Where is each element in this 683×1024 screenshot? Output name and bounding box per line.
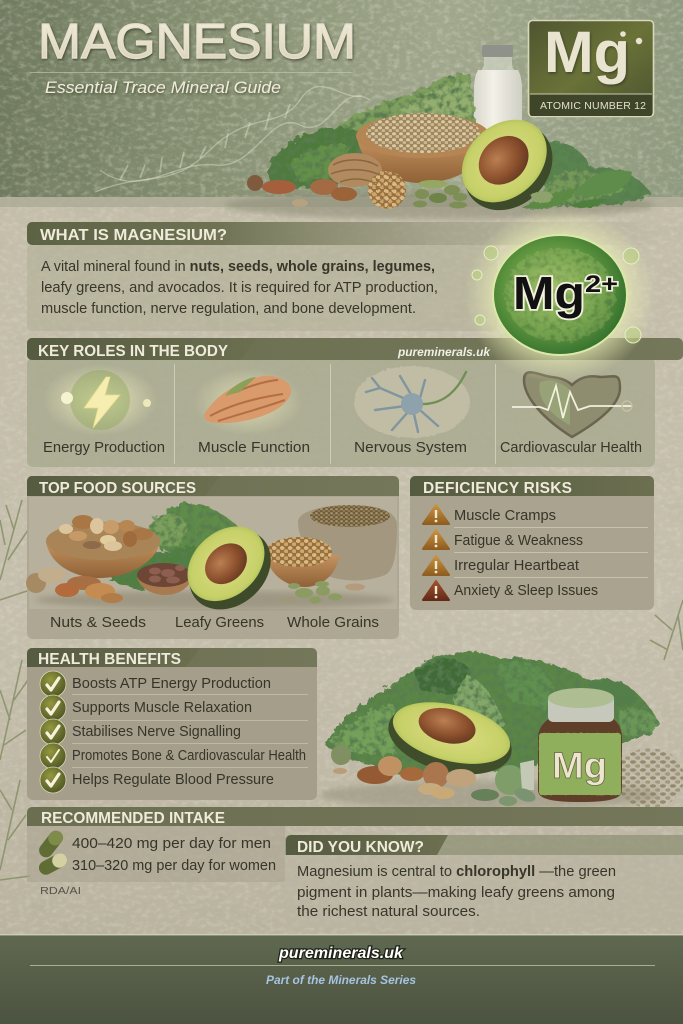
icon: muscle almond	[193, 368, 303, 436]
food heading bar	[27, 476, 399, 496]
intake heading bar	[27, 807, 683, 826]
benefits list: Supports Muscle Relaxation	[72, 699, 252, 716]
warning: muscle cramps	[423, 505, 449, 524]
roles heading tab	[27, 338, 258, 360]
deficiency heading bar	[410, 476, 654, 496]
description text: A vital mineral found in nuts, seeds, whole grains, legumes,	[41, 258, 435, 275]
lentils scatter	[616, 748, 683, 808]
risk list: Irregular Heartbeat	[454, 557, 580, 574]
footer series note: Part of the Minerals Series	[266, 975, 416, 987]
icon: neuron	[354, 366, 470, 438]
callout text: the richest natural sources.	[297, 903, 480, 920]
spinach front leaves	[522, 170, 632, 209]
panel body	[27, 245, 497, 331]
footer url: pureminerals.uk	[278, 945, 404, 962]
panel: top food sources	[26, 476, 399, 639]
greens	[108, 503, 240, 590]
icon: light capsule	[36, 851, 70, 877]
wooden bowl	[356, 113, 490, 183]
leafy greens	[325, 652, 660, 775]
panel: key roles in the body	[27, 338, 683, 467]
risk list: Anxiety & Sleep Issues	[454, 582, 598, 599]
intake body	[27, 824, 285, 882]
panel: did you know	[285, 835, 683, 928]
role labels: Nervous System	[354, 439, 467, 456]
food heading text: TOP FOOD SOURCES	[39, 480, 196, 497]
benefits body	[27, 660, 317, 800]
footer band	[0, 934, 683, 1024]
walnut	[328, 153, 382, 187]
check icons	[40, 671, 66, 793]
role labels: Energy Production	[43, 439, 165, 456]
benefits list	[72, 675, 306, 788]
bean bowl	[137, 563, 192, 595]
benefits heading tab	[27, 648, 200, 667]
description text: leafy greens, and avocados. It is required for ATP production,	[41, 279, 438, 296]
intake amounts: 400–420 mg per day for men	[72, 835, 271, 852]
roles heading text: KEY ROLES IN THE BODY	[38, 343, 229, 360]
food illustration	[26, 503, 397, 626]
callout text: Magnesium is central to chlorophyll —the green	[297, 863, 616, 880]
hero food illustration	[225, 45, 655, 228]
loose nuts	[26, 567, 123, 603]
warning: irregular heartbeat	[423, 556, 449, 575]
burlap sack	[298, 505, 397, 580]
pumpkin seeds	[413, 180, 467, 208]
icon: dark capsule	[36, 828, 66, 860]
deficiency body	[410, 480, 654, 610]
food labels: Leafy Greens	[175, 614, 264, 631]
warning: fatigue	[423, 530, 449, 549]
decorative plants	[0, 500, 683, 880]
section heading: WHAT IS MAGNESIUM?	[40, 227, 227, 244]
subtitle: Essential Trace Mineral Guide	[45, 78, 281, 97]
icon: Mg2+ orb: 2+	[585, 271, 618, 298]
atomic number: ATOMIC NUMBER 12	[540, 100, 646, 112]
callout heading text: DID YOU KNOW?	[297, 839, 424, 856]
role labels	[43, 439, 642, 456]
panel: health benefits	[27, 648, 317, 800]
benefits heading text: HEALTH BENEFITS	[38, 651, 181, 668]
avocado	[444, 103, 570, 228]
grain bowl	[266, 537, 339, 587]
intake amounts	[72, 835, 276, 874]
intake amounts: 310–320 mg per day for women	[72, 857, 276, 874]
almonds	[247, 175, 357, 207]
food labels: Nuts & Seeds	[50, 614, 146, 631]
callout heading bar	[285, 835, 683, 855]
leafy greens back	[268, 74, 652, 208]
orb label: Mg	[513, 267, 585, 319]
benefits list: Boosts ATP Energy Production	[72, 675, 271, 692]
header band	[0, 0, 683, 207]
title rule	[30, 72, 352, 73]
deficiency heading text: DEFICIENCY RISKS	[423, 480, 572, 497]
dna helix decoration	[95, 87, 370, 192]
role labels: Muscle Function	[198, 439, 310, 456]
risk list	[454, 507, 598, 599]
panel: deficiency risks	[410, 476, 654, 610]
green seeds	[283, 581, 365, 604]
roles panel body	[27, 358, 655, 467]
role labels: Cardiovascular Health	[500, 439, 642, 456]
risk list: Fatigue & Weakness	[454, 532, 583, 549]
milk bottle	[474, 45, 522, 138]
supplement and greens illustration	[320, 652, 683, 809]
nut cluster	[368, 171, 406, 209]
nuts	[331, 745, 476, 799]
description text: muscle function, nerve regulation, and bone development.	[41, 300, 416, 317]
benefits list: Helps Regulate Blood Pressure	[72, 771, 274, 788]
food labels	[50, 614, 379, 631]
intake heading text: RECOMMENDED INTAKE	[41, 810, 225, 827]
tile symbol: Mg	[544, 20, 630, 85]
roles heading bar	[27, 338, 683, 360]
description text	[41, 258, 438, 317]
watermark url: pureminerals.uk	[397, 345, 491, 359]
callout heading tab	[286, 835, 448, 855]
icon: energy bolt	[42, 364, 158, 436]
title: MAGNESIUM	[38, 15, 356, 69]
benefits heading bar	[27, 648, 317, 667]
jar label text: Mg	[552, 745, 607, 786]
intake note: RDA/AI	[40, 886, 81, 897]
section heading bar	[27, 222, 667, 245]
tile dots	[620, 31, 642, 44]
avocado half	[381, 691, 519, 786]
callout body	[285, 848, 683, 928]
food labels: Whole Grains	[287, 614, 379, 631]
callout text: pigment in plants—making leafy greens among	[297, 884, 615, 901]
food panel body	[27, 490, 399, 639]
benefits list: Promotes Bone & Cardiovascular Health	[72, 747, 306, 764]
callout text	[297, 863, 616, 920]
risk list: Muscle Cramps	[454, 507, 556, 524]
element tile	[528, 20, 654, 116]
panel: recommended intake	[27, 807, 683, 897]
icon: cardiovascular heart	[512, 372, 632, 437]
benefits list: Stabilises Nerve Signalling	[72, 723, 241, 740]
icon: Mg2+ orb	[464, 207, 656, 383]
capsules	[471, 760, 537, 806]
food heading tab	[27, 476, 220, 496]
nuts bowl	[46, 515, 160, 578]
panel: what is magnesium	[27, 222, 667, 331]
supplement jar	[538, 688, 622, 802]
warning: anxiety	[423, 581, 449, 600]
avocado	[170, 511, 287, 626]
